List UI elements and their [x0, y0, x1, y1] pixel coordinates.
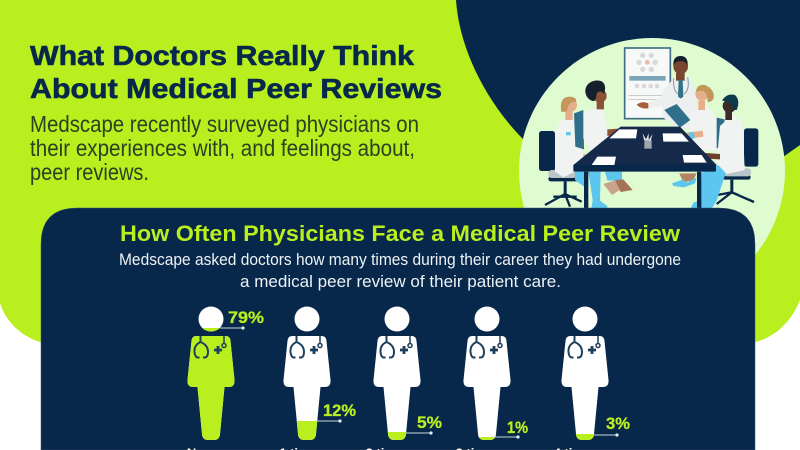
poster on wall [625, 48, 670, 119]
standing doctor [637, 56, 697, 130]
lime green background [0, 0, 800, 342]
figure: 1%: 1% [507, 418, 528, 437]
figure: 5%: 5% [417, 413, 442, 432]
title: What Doctors Really Think [30, 40, 415, 71]
panel description: Medscape asked doctors how many times during their career they had undergone [119, 250, 681, 269]
dark-haired man doctor, right [691, 94, 745, 209]
right chair [717, 128, 758, 204]
figure: 1% [456, 306, 528, 450]
panel description [119, 250, 681, 291]
navy corner shape [456, 0, 800, 170]
figure: 12%: 12% [323, 401, 356, 420]
intro text: Medscape recently surveyed physicians on [30, 111, 419, 137]
title [30, 40, 442, 104]
intro text [30, 111, 419, 185]
woman doctor with dark hair [574, 81, 633, 195]
panel: how often physicians face a peer review [41, 208, 755, 450]
figure: 3%: 3% [606, 414, 630, 433]
meeting table [573, 127, 717, 209]
blonde woman doctor, right [672, 85, 725, 187]
blonde seated doctor [555, 97, 607, 209]
figure: 79% never [181, 306, 264, 450]
title: About Medical Peer Reviews [30, 73, 442, 104]
left chair seat [548, 170, 577, 178]
intro text: peer reviews. [30, 159, 149, 185]
figure: 79% never: 79% [228, 308, 264, 327]
panel heading: How Often Physicians Face a Medical Peer Review [120, 221, 681, 246]
right chair seat [723, 168, 751, 176]
illustration: doctors in a meeting [539, 48, 758, 209]
left chair [539, 131, 582, 207]
light green circle behind illustration [519, 38, 785, 304]
figure: 5% [366, 306, 442, 450]
figure: 12% [277, 306, 356, 450]
intro text: their experiences with, and feelings about, [30, 135, 415, 161]
figure: 3% [554, 306, 630, 450]
panel description: a medical peer review of their patient care. [240, 272, 561, 291]
